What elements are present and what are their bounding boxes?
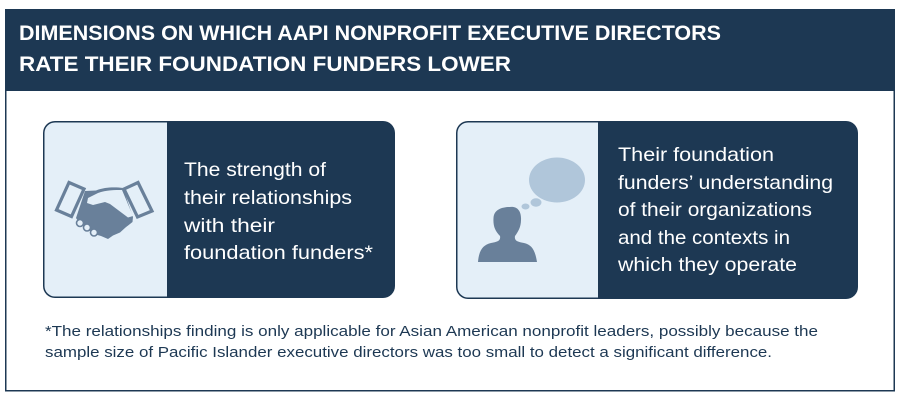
title: RATE THEIR FOUNDATION FUNDERS LOWER — [19, 52, 511, 76]
title: DIMENSIONS ON WHICH AAPI NONPROFIT EXECUTIVE DIRECTORS — [19, 21, 721, 45]
footnote: *The relationships finding is only applicable for Asian American nonprofit leaders, possibly because the — [45, 323, 818, 340]
card text: funders’ understanding — [618, 172, 833, 194]
card text — [183, 159, 373, 264]
icon: thought bubble — [522, 158, 585, 210]
card text: with their — [183, 215, 276, 237]
footnote — [45, 323, 818, 361]
card text: Their foundation — [618, 144, 774, 166]
card text: and the contexts in — [618, 227, 790, 249]
header banner — [5, 9, 895, 91]
panel: understanding card — [456, 121, 858, 299]
card text: The strength of — [184, 159, 327, 181]
icon: person silhouette — [478, 207, 537, 262]
card text — [617, 144, 833, 276]
card text: foundation funders* — [184, 242, 373, 264]
icon: handshake — [56, 182, 152, 239]
card text: of their organizations — [618, 199, 812, 221]
footnote: sample size of Pacific Islander executive directors was too small to detect a significant difference. — [45, 344, 772, 361]
title — [19, 21, 721, 76]
panel: relationships card — [43, 121, 395, 298]
card text: their relationships — [184, 187, 352, 209]
card text: which they operate — [617, 254, 797, 276]
